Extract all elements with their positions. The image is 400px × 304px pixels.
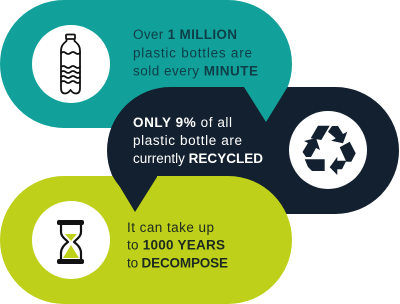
text block: decomposition time [127, 220, 228, 270]
text block: bottles sold: sold every MINUTE [133, 64, 258, 78]
icon: recycling symbol [289, 111, 367, 189]
text block: bottles sold: plastic bottles are [133, 46, 252, 60]
panel: teal bottle sales shape [0, 0, 292, 128]
teal speech tail [240, 70, 288, 122]
text block: decomposition time: to 1000 YEARS [127, 238, 225, 252]
text block: recycled share: currently RECYCLED [133, 151, 263, 166]
text block: bottles sold: Over 1 MILLION [133, 27, 237, 42]
text block: recycled share: ONLY 9% of all [133, 115, 232, 130]
panel: dark recycling shape [107, 87, 399, 214]
text block: decomposition time: It can take up [127, 220, 214, 235]
text block: recycled share [133, 115, 263, 166]
icon: hourglass [32, 201, 110, 279]
panel: lime decomposition shape [0, 176, 292, 304]
text block: recycled share: plastic bottle are [133, 133, 242, 148]
text block: decomposition time: to DECOMPOSE [127, 256, 228, 270]
text block: bottles sold [133, 27, 258, 78]
dark speech tail [112, 175, 157, 212]
icon: plastic bottle [32, 25, 110, 103]
